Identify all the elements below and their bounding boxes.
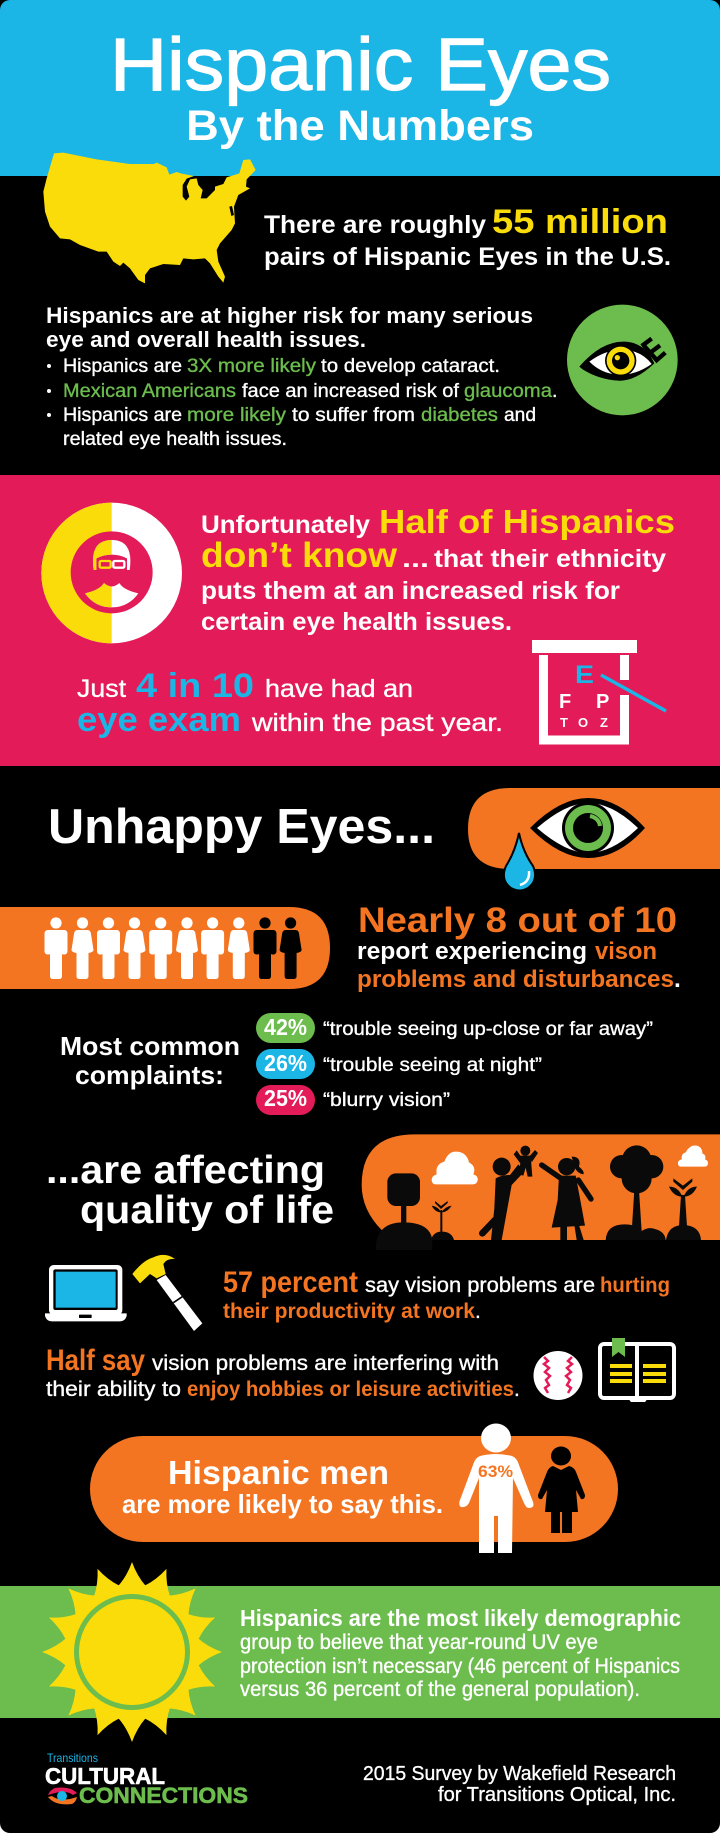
text: 57 percent: say vision problems are (365, 1274, 595, 1297)
text: 4 in 10 eye exam: 4 in 10 (136, 667, 254, 705)
text: higher risk list: to develop cataract. (321, 355, 500, 377)
text: higher risk list (46, 303, 557, 450)
text: UV protection: Hispanics are the most likely demographic (240, 1605, 681, 1631)
text: nearly 8 out of 10: vison (595, 938, 657, 965)
text: higher risk list: . (552, 380, 557, 402)
text: half of Hispanics: puts them at an increased risk for (201, 577, 620, 605)
panel: Hispanic men callout (90, 1424, 618, 1553)
icon: eye in green circle (567, 305, 678, 415)
text: higher risk list: diabetes (421, 404, 498, 426)
text: UV protection: protection isn’t necessary (46 percent of Hispanics (240, 1655, 680, 1678)
panel: unhappy eyes (48, 788, 720, 890)
text: UV protection (240, 1605, 681, 1701)
text: 4 in 10 eye exam: eye exam (77, 701, 241, 739)
text: half of Hispanics: ... (402, 545, 429, 573)
panel: 8 out of 10 (0, 901, 681, 993)
text: half of Hispanics: don’t know (201, 536, 398, 575)
text: half say: Half say (46, 1344, 145, 1377)
panel: work and hobbies (45, 1255, 674, 1402)
text: half say: their ability to (46, 1378, 181, 1401)
text: survey source: 2015 Survey by Wakefield Research (363, 1763, 676, 1785)
text: UV protection: group to believe that year-round UV eye (240, 1631, 598, 1654)
text: 57 percent: their productivity at work (223, 1300, 475, 1323)
title: Hispanic Eyes (110, 23, 611, 106)
text: half say: . (514, 1378, 520, 1401)
text: survey source (363, 1763, 676, 1806)
icon: baseball (534, 1351, 582, 1400)
subtitle: By the Numbers (186, 102, 534, 150)
text: half of Hispanics: that their ethnicity (434, 545, 666, 573)
complaint: 25 percent: “blurry vision” (323, 1089, 450, 1111)
icon: US map (43, 153, 256, 283)
text: half of Hispanics: Unfortunately (201, 511, 370, 539)
pictogram: 10 people on orange banner (0, 907, 330, 989)
complaint: 42 percent: 42% (264, 1014, 307, 1040)
text: half say: vision problems are interfering with (152, 1352, 499, 1375)
woman (542, 1157, 591, 1240)
text: higher risk list: eye and overall health issues. (46, 327, 366, 352)
complaint: 26 percent: “trouble seeing at night” (323, 1054, 542, 1076)
tree right and hills (606, 1145, 701, 1240)
icon: eye chart: O (578, 715, 588, 730)
text: nearly 8 out of 10: problems and disturbances (357, 966, 674, 993)
illustration: family outdoors (362, 1134, 720, 1250)
logo: Transitions Cultural Connections: Transitions (47, 1751, 98, 1765)
logo: Transitions Cultural Connections: CONNECTIONS (79, 1783, 248, 1808)
text: higher risk list: to suffer from (292, 404, 415, 426)
tree and hills left (376, 1173, 454, 1250)
heading: most common complaints (60, 1031, 240, 1090)
icon: eye chart: T (560, 715, 568, 730)
heading: are affecting quality of life (46, 1149, 334, 1232)
text: 55 million pairs: 55 million (492, 203, 668, 241)
text: Hispanic men: are more likely to say this. (122, 1489, 443, 1519)
text: half say: enjoy hobbies or leisure activities (187, 1378, 514, 1401)
text: 4 in 10 eye exam (77, 667, 503, 739)
text: half of Hispanics: Half of Hispanics (379, 503, 675, 540)
text: 55 million pairs: pairs of Hispanic Eyes in the U.S. (264, 243, 671, 271)
icon: eye chart (532, 640, 666, 740)
text: UV protection: versus 36 percent of the general population). (240, 1678, 640, 1701)
text: Hispanic men (122, 1454, 443, 1519)
text: higher risk list: more likely (187, 404, 286, 426)
icon: eye chart: E (575, 661, 594, 689)
icon: open book (600, 1338, 674, 1402)
heading: most common complaints: complaints: (75, 1060, 224, 1090)
panel: most common complaints (60, 1013, 653, 1115)
heading: unhappy eyes: Unhappy Eyes... (48, 800, 435, 854)
heading: most common complaints: Most common (60, 1031, 240, 1061)
man lifting child (482, 1146, 538, 1240)
text: survey source: for Transitions Optical, Inc. (438, 1784, 676, 1806)
icon: woman (538, 1446, 585, 1533)
text: higher risk list: Hispanics are (63, 404, 182, 426)
panel: quality of life (46, 1134, 720, 1250)
text: nearly 8 out of 10: report experiencing (357, 938, 587, 965)
text: half of Hispanics: certain eye health issues. (201, 608, 512, 636)
complaint: 26 percent (256, 1049, 542, 1079)
icon: eye chart: Z (600, 715, 608, 730)
complaint: 25 percent: 25% (264, 1085, 307, 1111)
panel: footer (45, 1751, 676, 1808)
text: higher risk list: 3X more likely (187, 355, 316, 377)
heading: are affecting quality of life: ...are affecting (46, 1149, 325, 1192)
panel: UV protection (0, 1562, 720, 1742)
text: 4 in 10 eye exam: Just (77, 675, 126, 703)
logo: Transitions Cultural Connections: CULTURAL (45, 1763, 165, 1789)
panel: header (0, 0, 720, 176)
icon: crying eye on orange banner (468, 788, 720, 890)
cloud left (432, 1152, 478, 1184)
icon: laptop (45, 1265, 127, 1321)
text: half say (46, 1344, 520, 1401)
text: higher risk list: and (504, 404, 536, 426)
heading: are affecting quality of life: quality of life (80, 1189, 334, 1232)
text: higher risk list: glaucoma (464, 380, 552, 402)
complaint: 26 percent: 26% (264, 1050, 307, 1076)
icon: eye chart: P (596, 691, 609, 713)
text: nearly 8 out of 10: Nearly 8 out of 10 (358, 901, 677, 940)
text: half of Hispanics (201, 503, 675, 636)
text: 57 percent: 57 percent (223, 1266, 358, 1299)
icon: person with glasses in circle (41, 503, 182, 643)
text: higher risk list: Mexican Americans (63, 380, 236, 402)
panel: half don't know (0, 475, 720, 766)
text: higher risk list: related eye health issues. (63, 428, 287, 450)
complaint: 42 percent: “trouble seeing up-close or far away” (323, 1018, 653, 1040)
icon: sun (42, 1562, 222, 1742)
complaint: 25 percent (256, 1085, 450, 1115)
logo: Transitions Cultural Connections (45, 1751, 248, 1808)
cloud right (678, 1145, 708, 1167)
icon: eye chart: F (559, 691, 571, 713)
icon: man 63 percent: 63% (478, 1462, 513, 1481)
complaint: 42 percent (256, 1013, 653, 1043)
text: 4 in 10 eye exam: have had an (265, 675, 413, 703)
icon: man 63 percent (459, 1424, 534, 1553)
text: nearly 8 out of 10: . (674, 966, 681, 993)
text: 57 percent: hurting (600, 1274, 670, 1297)
text: 55 million pairs (264, 203, 671, 271)
text: Hispanic men: Hispanic men (168, 1454, 389, 1491)
text: higher risk list: face an increased risk of (242, 380, 460, 402)
text: higher risk list: Hispanics are at higher risk for many serious (46, 303, 533, 328)
panel: population and risk (43, 153, 678, 450)
text: higher risk list: Hispanics are (63, 355, 182, 377)
text: 4 in 10 eye exam: within the past year. (251, 709, 503, 737)
icon: hammer (132, 1255, 202, 1331)
text: 55 million pairs: There are roughly (264, 211, 486, 239)
text: 57 percent (223, 1266, 670, 1323)
text: 57 percent: . (475, 1300, 481, 1323)
text: nearly 8 out of 10 (357, 901, 681, 993)
